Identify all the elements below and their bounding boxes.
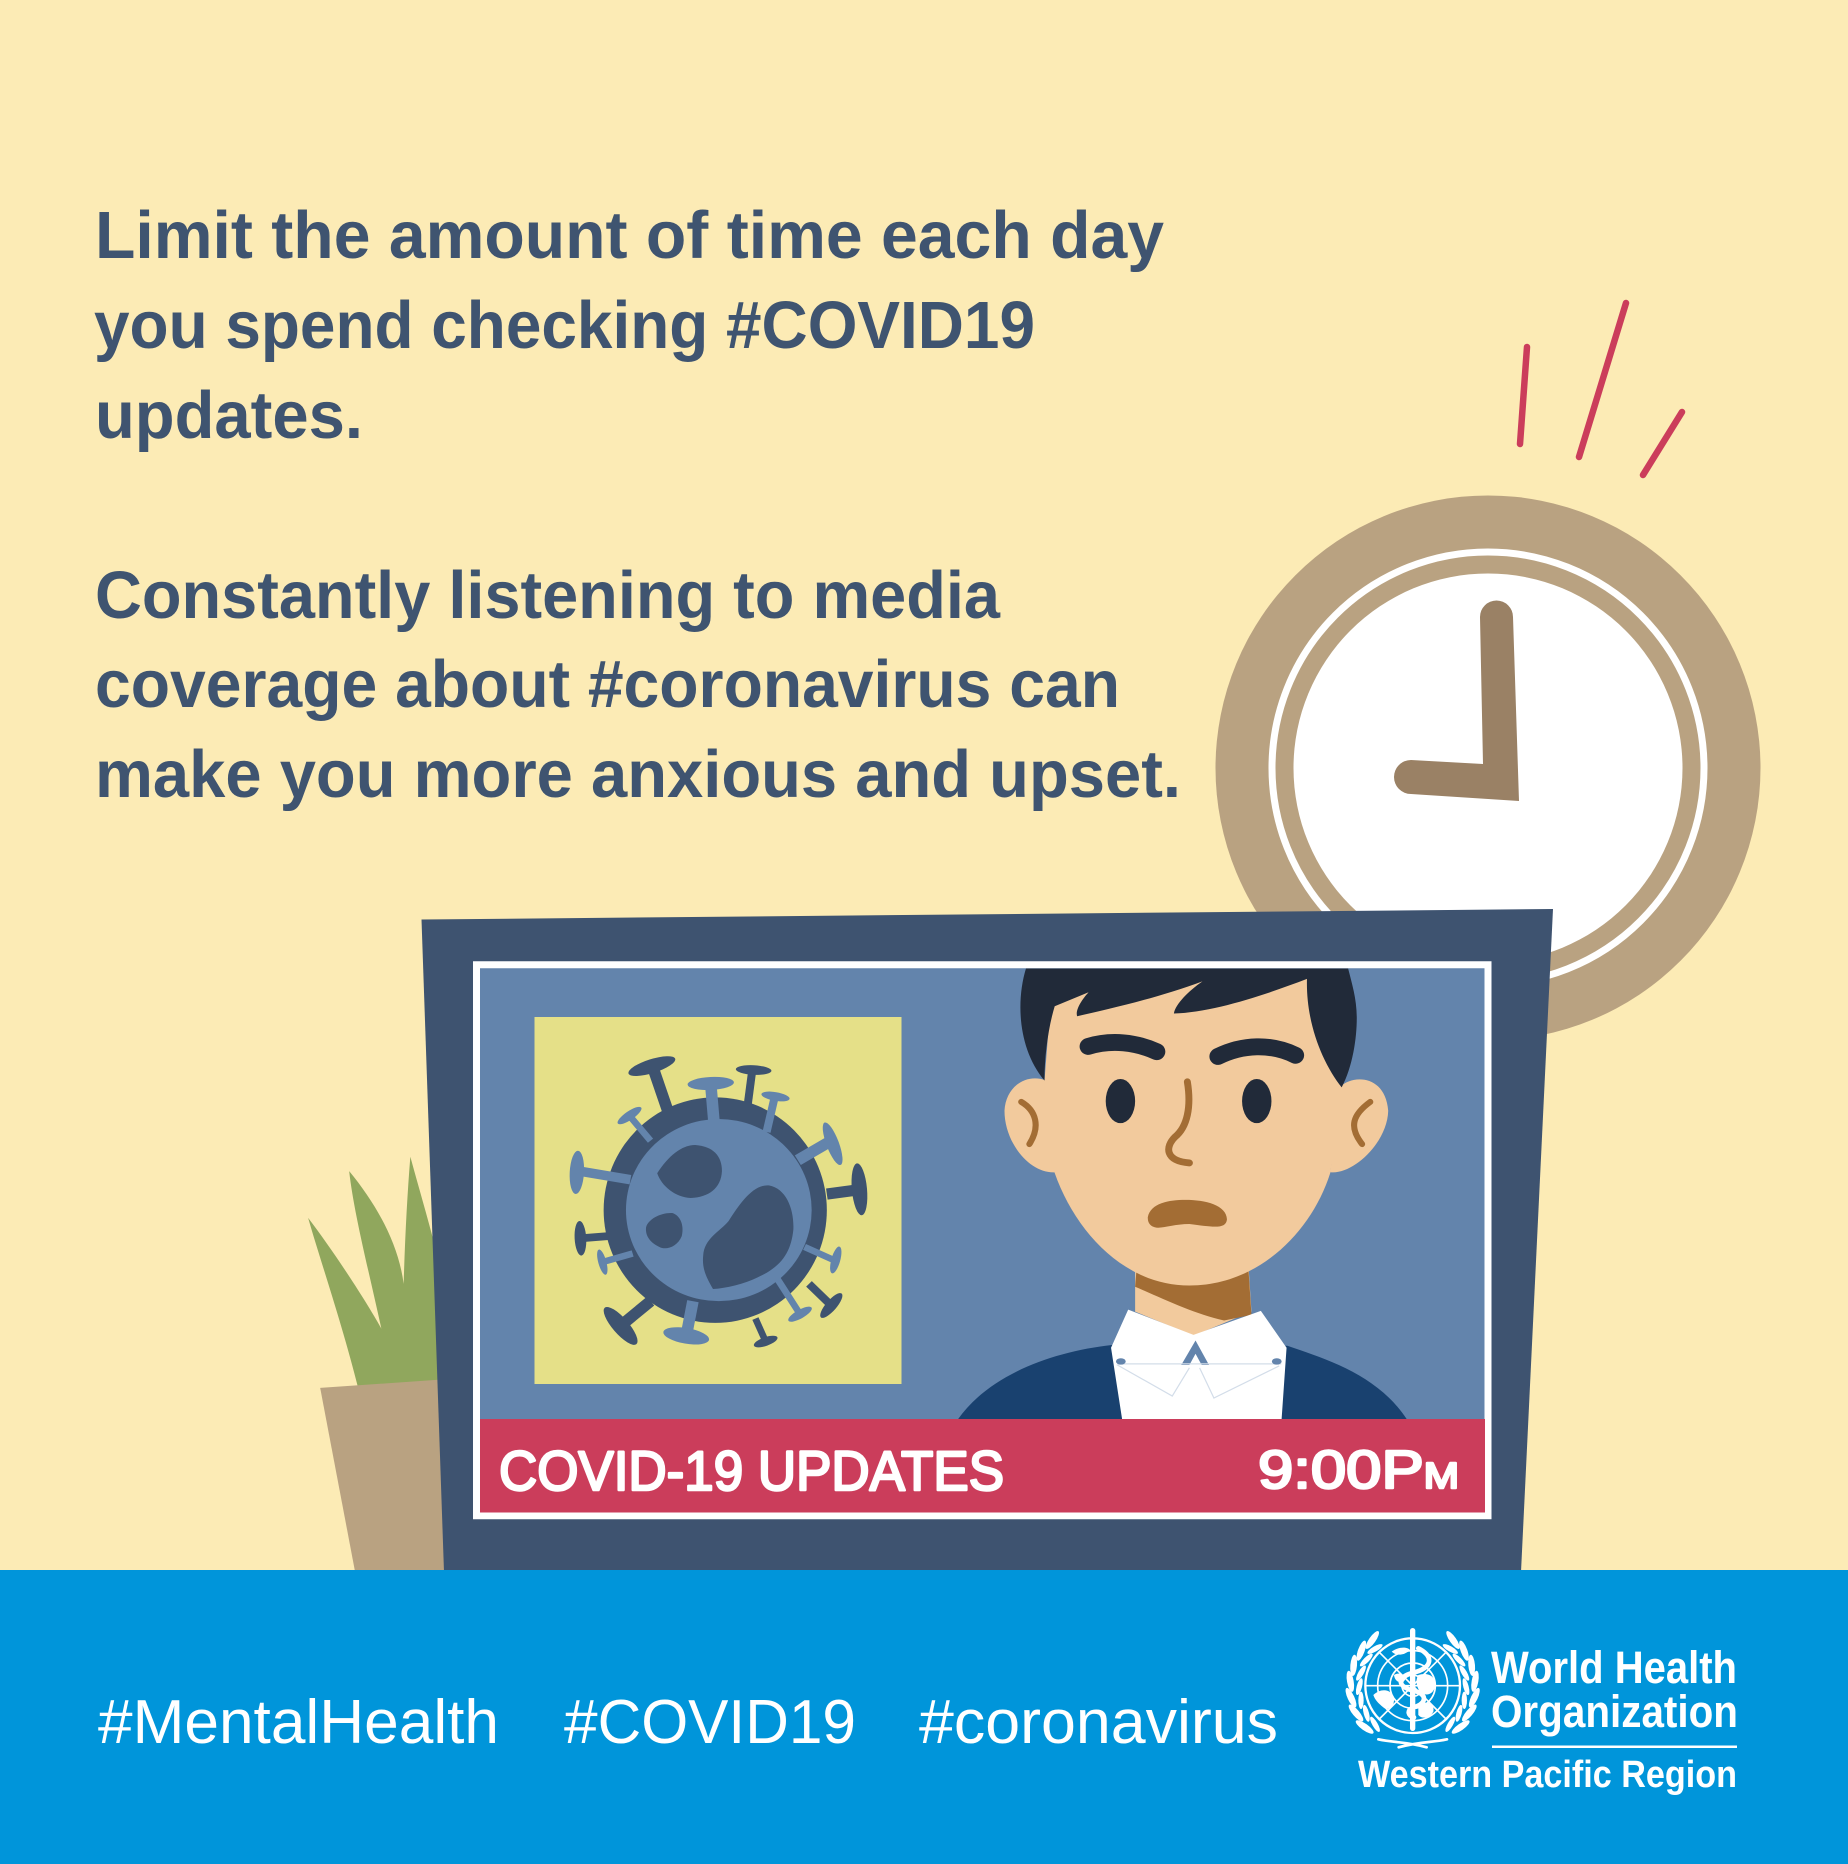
tie knot [1181, 1341, 1209, 1365]
ears [1004, 1078, 1388, 1172]
text block: media coverage: make you more anxious and upset. [95, 737, 1181, 812]
footer bar [0, 1570, 1848, 1864]
text block: media coverage [95, 558, 1181, 812]
shirt collar [1111, 1310, 1287, 1424]
icon: coronavirus [569, 1052, 869, 1350]
pot [320, 1379, 450, 1571]
news anchor figure [955, 962, 1410, 1424]
laurel left [1343, 1629, 1384, 1736]
eyes [1106, 1079, 1271, 1123]
WHO wordmark: Western Pacific Region [1358, 1754, 1737, 1796]
laurel right [1441, 1629, 1482, 1736]
icon: wall clock [1216, 496, 1760, 1040]
icon: WHO emblem [1343, 1629, 1482, 1747]
hair [1020, 962, 1357, 1087]
neck shadow [1135, 1271, 1251, 1320]
neck [1135, 1267, 1251, 1336]
globe [1365, 1638, 1460, 1733]
text block: limit your time: you spend checking #COVID19 [94, 288, 1035, 363]
ticker time: 9:00P M [1258, 1440, 1459, 1500]
monitor frame [422, 909, 1553, 1572]
text block: media coverage: coverage about #coronavirus can [95, 647, 1120, 722]
nose [1169, 1082, 1189, 1163]
collar detail lines [1117, 1364, 1281, 1398]
hashtags: #coronavirus [919, 1688, 1278, 1757]
plant leaves [308, 1157, 441, 1388]
television monitor [422, 909, 1553, 1572]
WHO wordmark: Organization [1491, 1686, 1738, 1737]
screen [476, 965, 1488, 1516]
text block: limit your time: updates. [95, 378, 363, 453]
hashtags [98, 1688, 1278, 1757]
staff and serpent [1401, 1631, 1429, 1728]
icon: plant pot [308, 1157, 450, 1571]
WHO wordmark [1358, 1642, 1738, 1796]
jacket [955, 1345, 1410, 1424]
panel: virus image [534, 1017, 902, 1384]
mouth [1148, 1200, 1227, 1228]
face [1045, 966, 1342, 1286]
eyebrows [1088, 1042, 1296, 1056]
laurel stems [1378, 1739, 1447, 1747]
text block: limit your time [94, 198, 1164, 453]
hashtags: #MentalHealth [98, 1688, 499, 1757]
continents [1373, 1648, 1435, 1718]
inner ear marks [1021, 1102, 1370, 1144]
clock hands [1394, 600, 1519, 801]
text block: media coverage: Constantly listening to media [95, 558, 1001, 633]
hashtags: #COVID19 [564, 1688, 856, 1757]
text block: limit your time: Limit the amount of time each day [95, 198, 1164, 273]
ticker headline: COVID-19 UPDATES [499, 1439, 1004, 1502]
icon: alarm ticks above clock [1520, 303, 1682, 475]
news ticker bar [480, 1419, 1485, 1512]
WHO wordmark: World Health [1491, 1642, 1737, 1693]
